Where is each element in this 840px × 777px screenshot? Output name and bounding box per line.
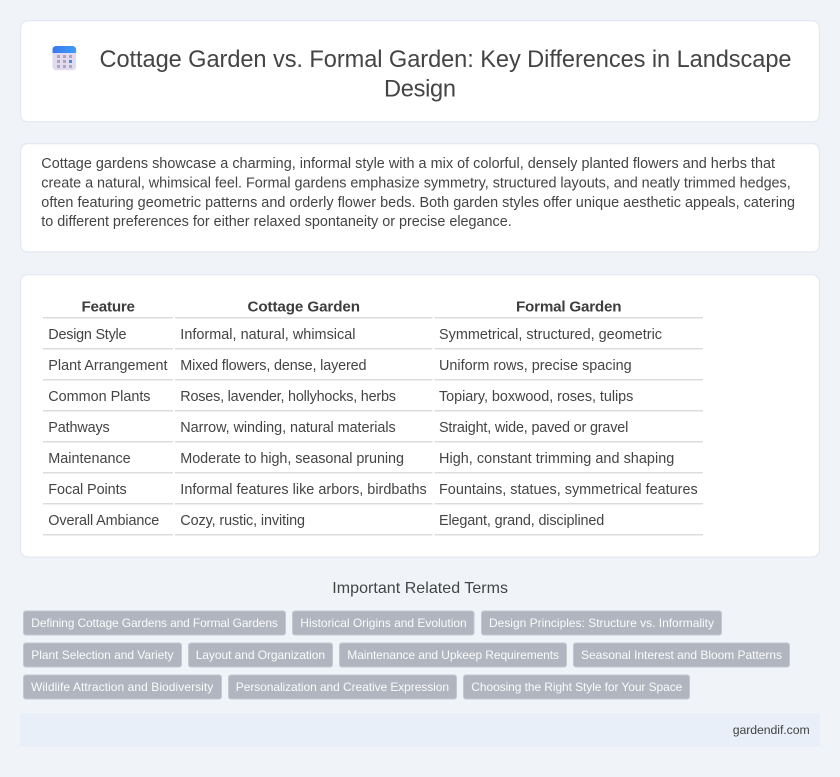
header panel: [21, 21, 819, 122]
related term tags: [24, 611, 790, 699]
row: overall ambiance: Cozy, rustic, inviting: [180, 513, 305, 529]
row: focal points: Focal Points: [48, 482, 127, 498]
tag: Layout and Organization: [196, 648, 325, 662]
table header: [82, 299, 622, 316]
row: plant arrangement: Uniform rows, precise spacing: [439, 358, 632, 374]
row: design style: Design Style: [48, 327, 126, 343]
row: overall ambiance: Overall Ambiance: [48, 513, 159, 529]
row: maintenance: [48, 451, 674, 467]
footer: gardendif.com: [733, 723, 810, 737]
tag: [464, 675, 690, 699]
row: focal points: [48, 482, 698, 498]
panel: introduction text: create a natural, whimsical feel. Formal gardens emphasize symmetry, structured layouts, and neatly trimmed hedges,: [41, 175, 791, 191]
row: common plants: Topiary, boxwood, roses, tulips: [439, 389, 633, 405]
tag: Defining Cottage Gardens and Formal Gardens: [31, 616, 278, 630]
table header: Feature: [82, 299, 135, 316]
table header: Formal Garden: [516, 299, 622, 316]
tag: [24, 675, 222, 699]
tag: Wildlife Attraction and Biodiversity: [31, 680, 213, 694]
row: focal points: Fountains, statues, symmetrical features: [439, 482, 698, 498]
icon: calendar: [52, 46, 76, 70]
row: common plants: Roses, lavender, hollyhocks, herbs: [180, 389, 396, 405]
row: design style: [48, 327, 662, 343]
title: Design: [384, 77, 456, 103]
tag: [24, 611, 286, 635]
row: common plants: [48, 389, 633, 405]
tag: Historical Origins and Evolution: [300, 616, 467, 630]
title: [100, 47, 792, 103]
tag: [24, 643, 182, 667]
tag: Personalization and Creative Expression: [236, 680, 449, 694]
heading: important related terms: Important Related Terms: [332, 580, 508, 597]
tag: [292, 611, 474, 635]
tag: [228, 675, 456, 699]
tag: [574, 643, 790, 667]
tag: [482, 611, 722, 635]
row: pathways: Pathways: [48, 420, 110, 436]
panel: comparison table: [21, 275, 819, 557]
panel: introduction text: Cottage gardens showcase a charming, informal style with a mix of colorful, densely planted flowers and herbs that: [41, 156, 775, 172]
row: maintenance: High, constant trimming and shaping: [439, 451, 674, 467]
row: maintenance: Maintenance: [48, 451, 131, 467]
row: plant arrangement: Plant Arrangement: [48, 358, 167, 374]
panel: introduction text: often featuring geometric patterns and orderly flower beds. Both garden styles offer unique aesthetic appeals, catering: [41, 195, 795, 211]
title: Cottage Garden vs. Formal Garden: Key Differences in Landscape: [100, 47, 792, 73]
tag: Plant Selection and Variety: [31, 648, 173, 662]
tag: [188, 643, 332, 667]
tag: Design Principles: Structure vs. Informality: [489, 616, 714, 630]
row: plant arrangement: [48, 358, 632, 374]
tag: [340, 643, 566, 667]
row: overall ambiance: Elegant, grand, disciplined: [439, 513, 604, 529]
row: plant arrangement: Mixed flowers, dense, layered: [180, 358, 366, 374]
row: focal points: Informal features like arbors, birdbaths: [180, 482, 427, 498]
tag: Maintenance and Upkeep Requirements: [347, 648, 559, 662]
row: design style: Informal, natural, whimsical: [180, 327, 356, 343]
row: overall ambiance: [48, 513, 604, 529]
panel: introduction text: to different preferences for either relaxed spontaneity or precise elegance.: [41, 214, 512, 230]
row: pathways: Straight, wide, paved or gravel: [439, 420, 628, 436]
row rules: [43, 317, 703, 536]
row: maintenance: Moderate to high, seasonal pruning: [180, 451, 404, 467]
row: design style: Symmetrical, structured, geometric: [439, 327, 662, 343]
footer: [20, 713, 820, 747]
tag: Choosing the Right Style for Your Space: [471, 680, 683, 694]
table header: Cottage Garden: [248, 299, 360, 316]
row: common plants: Common Plants: [48, 389, 150, 405]
row: pathways: [48, 420, 628, 436]
row: pathways: Narrow, winding, natural materials: [180, 420, 396, 436]
tag: Seasonal Interest and Bloom Patterns: [581, 648, 782, 662]
panel: introduction text: [21, 144, 819, 252]
